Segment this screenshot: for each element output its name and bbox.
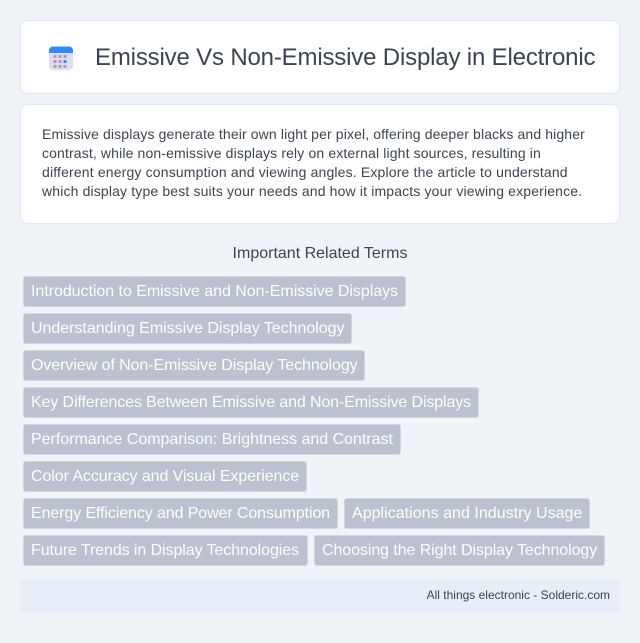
tag: energy efficiency: [23, 498, 338, 529]
panel: term tags: [23, 276, 605, 566]
tag: introduction: [23, 276, 406, 307]
summary paragraph: contrast, while non-emissive displays rely on external light sources, resulting in: [42, 145, 541, 161]
summary paragraph: different energy consumption and viewing angles. Explore the article to understand: [42, 164, 568, 180]
tag: choosing: [314, 535, 605, 566]
tag: future trends: [23, 535, 308, 566]
tag: future trends: Future Trends in Display Technologies: [31, 542, 299, 559]
panel: title card: [20, 20, 620, 94]
tag: overview: Overview of Non-Emissive Display Technology: [31, 357, 358, 374]
icon: calendar grid: [49, 46, 73, 70]
footer: [20, 579, 620, 613]
tag: key differences: [23, 387, 479, 418]
tag: understanding: [23, 313, 352, 344]
heading: related terms: Important Related Terms: [233, 245, 407, 262]
tag: performance: Performance Comparison: Brightness and Contrast: [31, 431, 393, 448]
summary paragraph: Emissive displays generate their own light per pixel, offering deeper blacks and higher: [42, 126, 585, 142]
summary paragraph: [42, 126, 585, 199]
tag: understanding: Understanding Emissive Display Technology: [31, 320, 345, 337]
summary paragraph: which display type best suits your needs and how it impacts your viewing experience.: [42, 183, 582, 199]
title: Emissive Vs Non-Emissive Display in Electronic: [95, 44, 595, 71]
tag: choosing: Choosing the Right Display Technology: [322, 542, 597, 559]
tag: color accuracy: Color Accuracy and Visual Experience: [31, 468, 299, 485]
tag: applications: [344, 498, 590, 529]
tag: key differences: Key Differences Between Emissive and Non-Emissive Displays: [31, 394, 471, 411]
panel: summary text: [20, 104, 620, 224]
tag: applications: Applications and Industry Usage: [352, 505, 582, 522]
tag: color accuracy: [23, 461, 307, 492]
tag: energy efficiency: Energy Efficiency and Power Consumption: [31, 505, 330, 522]
tag: overview: [23, 350, 365, 381]
tag: introduction: Introduction to Emissive and Non-Emissive Displays: [31, 283, 398, 300]
tag: performance: [23, 424, 401, 455]
footer credit: All things electronic - Solderic.com: [427, 588, 610, 602]
